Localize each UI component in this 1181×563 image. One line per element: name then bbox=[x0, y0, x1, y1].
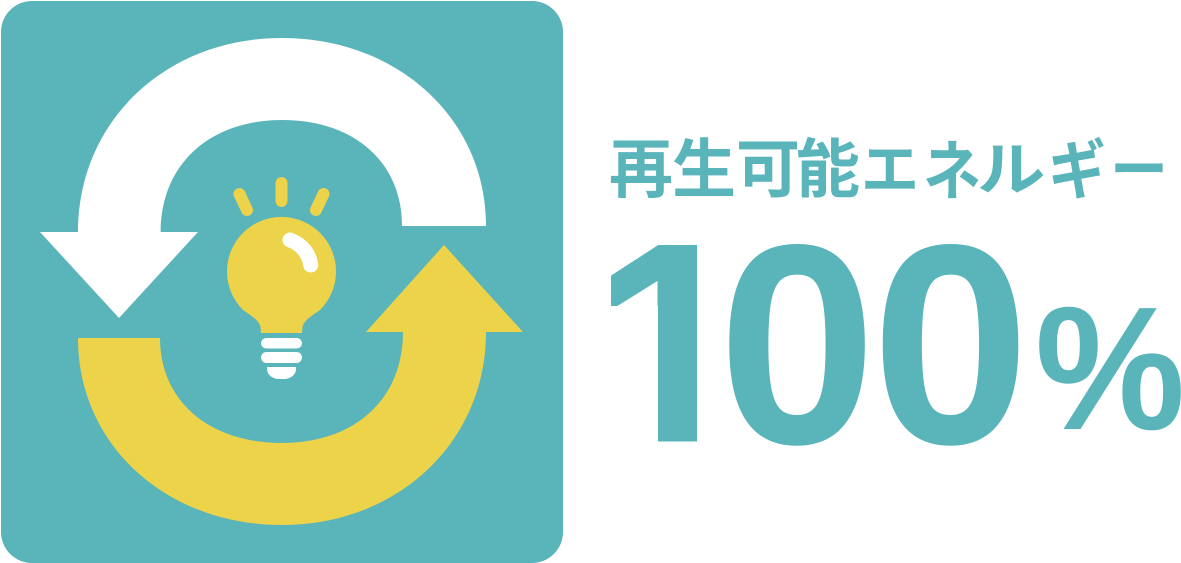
arrow: white curved arrow pointing down bbox=[40, 38, 486, 318]
digit 1: 1 bbox=[592, 184, 751, 502]
big number: 100% bbox=[611, 244, 1181, 446]
icon: bulb highlight bbox=[290, 240, 311, 265]
heading katakana ne: ネ bbox=[923, 136, 981, 209]
heading katakana ru: ル bbox=[977, 139, 1045, 203]
heading kanji: 再生可能 bbox=[609, 134, 860, 206]
heading katakana e: エ bbox=[861, 138, 919, 203]
heading: renewable energy bbox=[609, 134, 1168, 209]
heading katakana gi: ギ bbox=[1048, 135, 1106, 208]
icon: bulb rays bbox=[240, 183, 324, 210]
heading katakana long vowel: ー bbox=[1110, 138, 1168, 203]
digits 00: 00 bbox=[718, 186, 1030, 504]
arrow: yellow curved arrow pointing up bbox=[78, 245, 523, 525]
percent sign: % bbox=[1035, 270, 1181, 467]
icon: light bulb bbox=[227, 183, 336, 379]
icon: bulb glass bbox=[227, 217, 336, 333]
panel: teal rounded square bbox=[1, 1, 563, 563]
icon: bulb base bbox=[261, 338, 302, 379]
